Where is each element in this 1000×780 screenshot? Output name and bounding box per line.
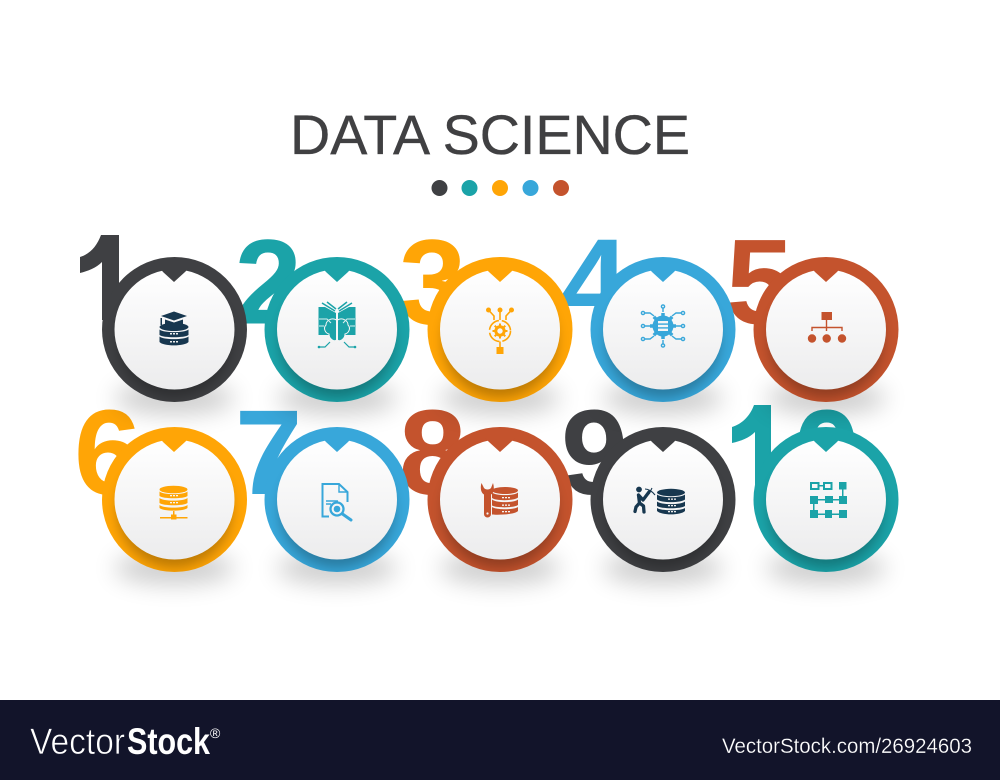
large step numbers: 6 (74, 384, 141, 520)
step 6 circle (102, 427, 247, 584)
step 9 circle (590, 427, 736, 584)
icon: wrench and database (481, 483, 518, 518)
footer image id: VectorStock.com/26924603 (722, 735, 972, 758)
icon: gear with server and circuit (641, 305, 685, 347)
icon: gear with nodes (486, 308, 514, 354)
step 8 circle (428, 427, 572, 584)
footer bar (0, 700, 1000, 780)
icon: book and brain (318, 302, 356, 348)
icon: miner and database (635, 487, 685, 514)
footer logo (30, 721, 221, 762)
step 5 circle (754, 257, 898, 414)
icon: networked database (160, 486, 188, 520)
footer logo: ® (210, 725, 221, 741)
large step numbers: 5 (726, 214, 793, 350)
icon: graduation cap on database (160, 312, 188, 345)
icon: flow blocks (810, 482, 847, 518)
icon: document search (322, 484, 351, 520)
large step numbers: 3 (399, 214, 466, 350)
step 2 circle (264, 257, 410, 414)
large step numbers: 10 (725, 384, 860, 520)
title: DATA SCIENCE (290, 103, 690, 166)
step 4 circle (590, 257, 736, 414)
step 10 circle (754, 427, 898, 584)
large step numbers: 7 (235, 384, 302, 520)
step 3 circle (428, 257, 572, 414)
large step numbers (78, 235, 854, 495)
large step numbers: 2 (234, 214, 302, 350)
footer logo: Vector (30, 721, 125, 762)
large step numbers: 4 (561, 213, 628, 349)
icon: hierarchy (808, 312, 846, 343)
large step numbers: 1 (72, 213, 139, 349)
step 7 circle (264, 427, 410, 584)
large step numbers: 9 (561, 384, 628, 520)
step 1 circle (102, 257, 247, 414)
title dots (432, 180, 569, 196)
footer logo: Stock (127, 721, 210, 762)
large step numbers: 8 (399, 384, 466, 520)
